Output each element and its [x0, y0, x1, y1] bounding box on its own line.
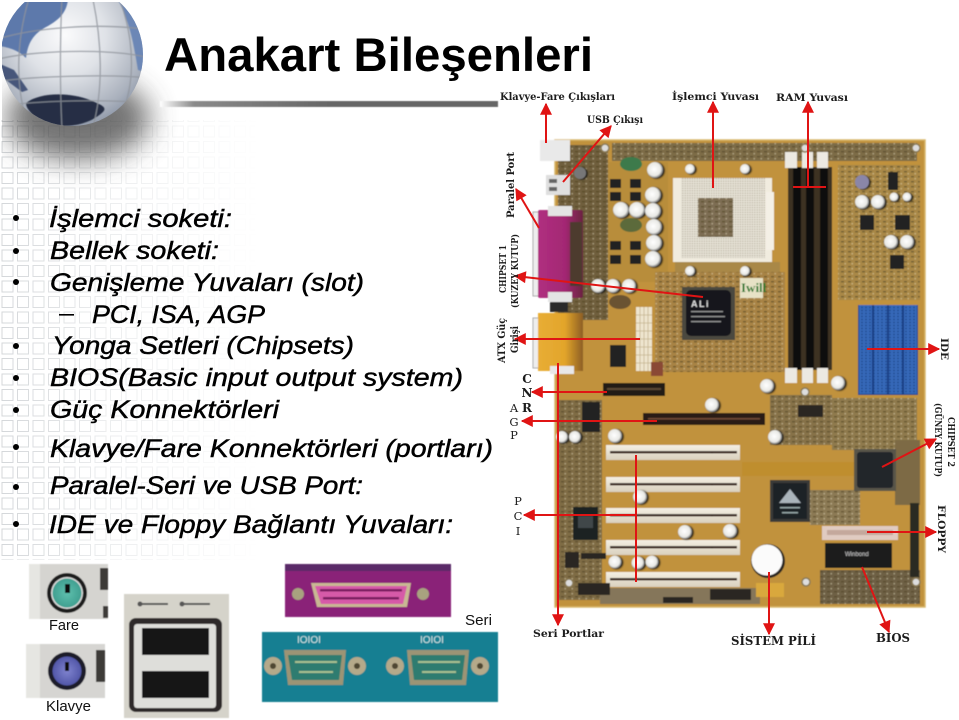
arrow: AGP	[522, 420, 657, 422]
photo: serial ports: IOIOI	[420, 635, 444, 646]
I/O: keyboard and USB	[540, 140, 570, 195]
arrow: serial	[557, 363, 559, 625]
photo: serial ports	[262, 632, 498, 702]
arrow: IDE	[867, 348, 939, 350]
motherboard labels: Paralel Port	[505, 152, 517, 218]
mount holes	[565, 144, 920, 587]
coils and power transistors	[582, 157, 910, 432]
motherboard labels: (KUZEY KUTUP)	[510, 234, 521, 308]
arrow: RAM	[807, 102, 809, 187]
arrow: PCI	[524, 514, 636, 516]
arrow: floppy	[867, 531, 936, 533]
globe logo	[0, 0, 150, 160]
ATX power connector	[636, 307, 663, 376]
bullet list: PCI, ISA, AGP	[92, 301, 265, 329]
battery	[751, 544, 785, 597]
RAM T-bar and PCI bus line	[636, 187, 826, 582]
motherboard labels: SİSTEM PİLİ	[731, 633, 816, 648]
arrow: CNR	[532, 391, 607, 393]
title rule	[160, 101, 498, 107]
photo: keyboard port	[26, 644, 105, 698]
motherboard labels: Girişi	[509, 326, 521, 353]
label: Klavye: Klavye	[46, 698, 91, 715]
arrow: parallel	[516, 189, 539, 228]
bullet list: BIOS(Basic input output system)	[50, 364, 463, 392]
motherboard labels: I	[516, 524, 520, 538]
parallel port	[533, 206, 583, 302]
iwill logo: Iwill	[741, 280, 767, 295]
traces and busy component zones	[558, 143, 920, 604]
RAM slots	[785, 152, 832, 383]
motherboard photo	[533, 140, 925, 607]
BIOS chip and floppy connector: Winbond	[845, 552, 869, 558]
bullet list: İşlemci soketi:	[49, 205, 232, 233]
arrow: USB	[563, 126, 611, 182]
serial port	[533, 302, 583, 374]
motherboard labels: N	[522, 386, 533, 400]
motherboard labels: BIOS	[876, 631, 910, 645]
label: Fare: Fare	[49, 617, 79, 634]
motherboard labels: USB Çıkışı	[587, 114, 643, 126]
motherboard labels: P	[510, 428, 518, 442]
background grid pattern	[2, 120, 194, 560]
bullet list: Güç Konnektörleri	[50, 396, 281, 424]
photo: serial ports: IOIOI	[297, 635, 321, 646]
motherboard labels: CHIPSET 1	[499, 245, 509, 293]
arrow: BIOS	[862, 567, 889, 632]
CNR slot	[603, 383, 665, 396]
other low headers	[565, 405, 823, 603]
arrow: ATX	[515, 338, 640, 340]
red arrows	[515, 102, 939, 634]
bullet list: Klavye/Fare Konnektörleri (portları)	[50, 435, 493, 463]
motherboard labels: RAM Yuvası	[776, 92, 848, 104]
motherboard labels: (GÜNEY KUTUP)	[932, 403, 945, 477]
CPU socket	[673, 178, 774, 262]
motherboard labels: R	[522, 401, 533, 415]
arrow: keyboard mouse	[545, 104, 547, 143]
north bridge chip	[682, 287, 735, 340]
motherboard labels: İşlemci Yuvası	[672, 89, 759, 103]
bullet list	[13, 205, 493, 539]
AGP slot	[643, 413, 765, 425]
motherboard labels: Klavye-Fare Çıkışları	[500, 91, 615, 103]
label: Seri: Seri	[465, 612, 492, 629]
bullet list: Yonga Setleri (Chipsets)	[52, 332, 354, 360]
motherboard labels: Seri Portlar	[533, 628, 604, 640]
motherboard labels: P	[514, 494, 522, 508]
motherboard labels	[496, 89, 955, 648]
BIOS chip and floppy connector	[822, 503, 919, 577]
motherboard labels: FLOPPY	[935, 505, 947, 554]
arrow: battery	[768, 572, 770, 634]
photo: parallel port	[285, 564, 451, 617]
arrow: chipset 1	[515, 276, 703, 297]
motherboard labels: CHIPSET 2	[945, 417, 955, 467]
motherboard labels: C	[514, 509, 523, 523]
motherboard labels: C	[522, 372, 532, 386]
motherboard labels: ATX Güç	[496, 318, 508, 364]
left IO chip	[573, 507, 598, 540]
bullet list: Paralel-Seri ve USB Port:	[50, 472, 363, 500]
title: Anakart Bileşenleri	[164, 28, 593, 81]
AMI BIOS controller chip	[770, 480, 810, 522]
motherboard labels: A	[509, 401, 519, 415]
bullet list: Genişleme Yuvaları (slot)	[50, 269, 364, 297]
north bridge chip: ALi	[691, 299, 710, 309]
photo: USB ports	[124, 594, 229, 718]
motherboard labels: G	[509, 415, 519, 429]
IDE connectors	[858, 305, 918, 395]
bullet list: Bellek soketi:	[50, 237, 219, 265]
capacitors	[556, 162, 914, 570]
south bridge chip	[854, 449, 896, 491]
PCI slots	[606, 445, 740, 587]
arrow: CPU socket	[712, 102, 714, 188]
photo: mouse port	[29, 564, 108, 619]
motherboard labels: IDE	[938, 338, 950, 360]
bullet list: IDE ve Floppy Bağlantı Yuvaları:	[49, 511, 453, 539]
arrow: chipset 2	[882, 439, 936, 467]
